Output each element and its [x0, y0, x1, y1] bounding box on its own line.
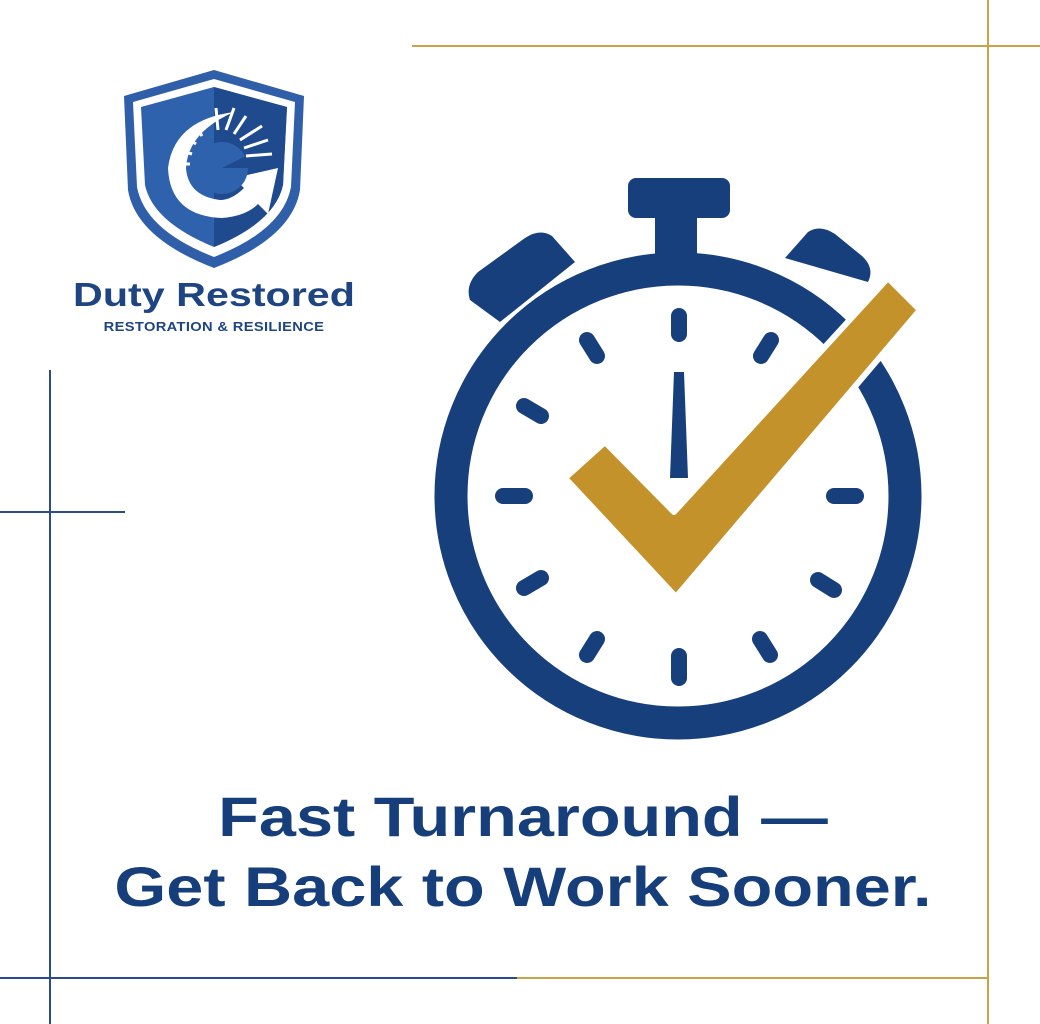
icon: shield — [124, 70, 304, 268]
checkmark — [565, 278, 920, 597]
logo — [73, 70, 355, 334]
ticks — [503, 316, 856, 678]
headline: Fast Turnaround — — [218, 785, 828, 848]
crown — [469, 178, 870, 322]
hand — [670, 372, 688, 478]
headline: Get Back to Work Sooner. — [114, 855, 932, 918]
tagline: RESTORATION & RESILIENCE — [104, 319, 324, 334]
headline — [114, 785, 932, 918]
brand name: Duty Restored — [73, 276, 355, 313]
dial — [451, 269, 905, 723]
stopwatch with checkmark — [434, 178, 922, 740]
